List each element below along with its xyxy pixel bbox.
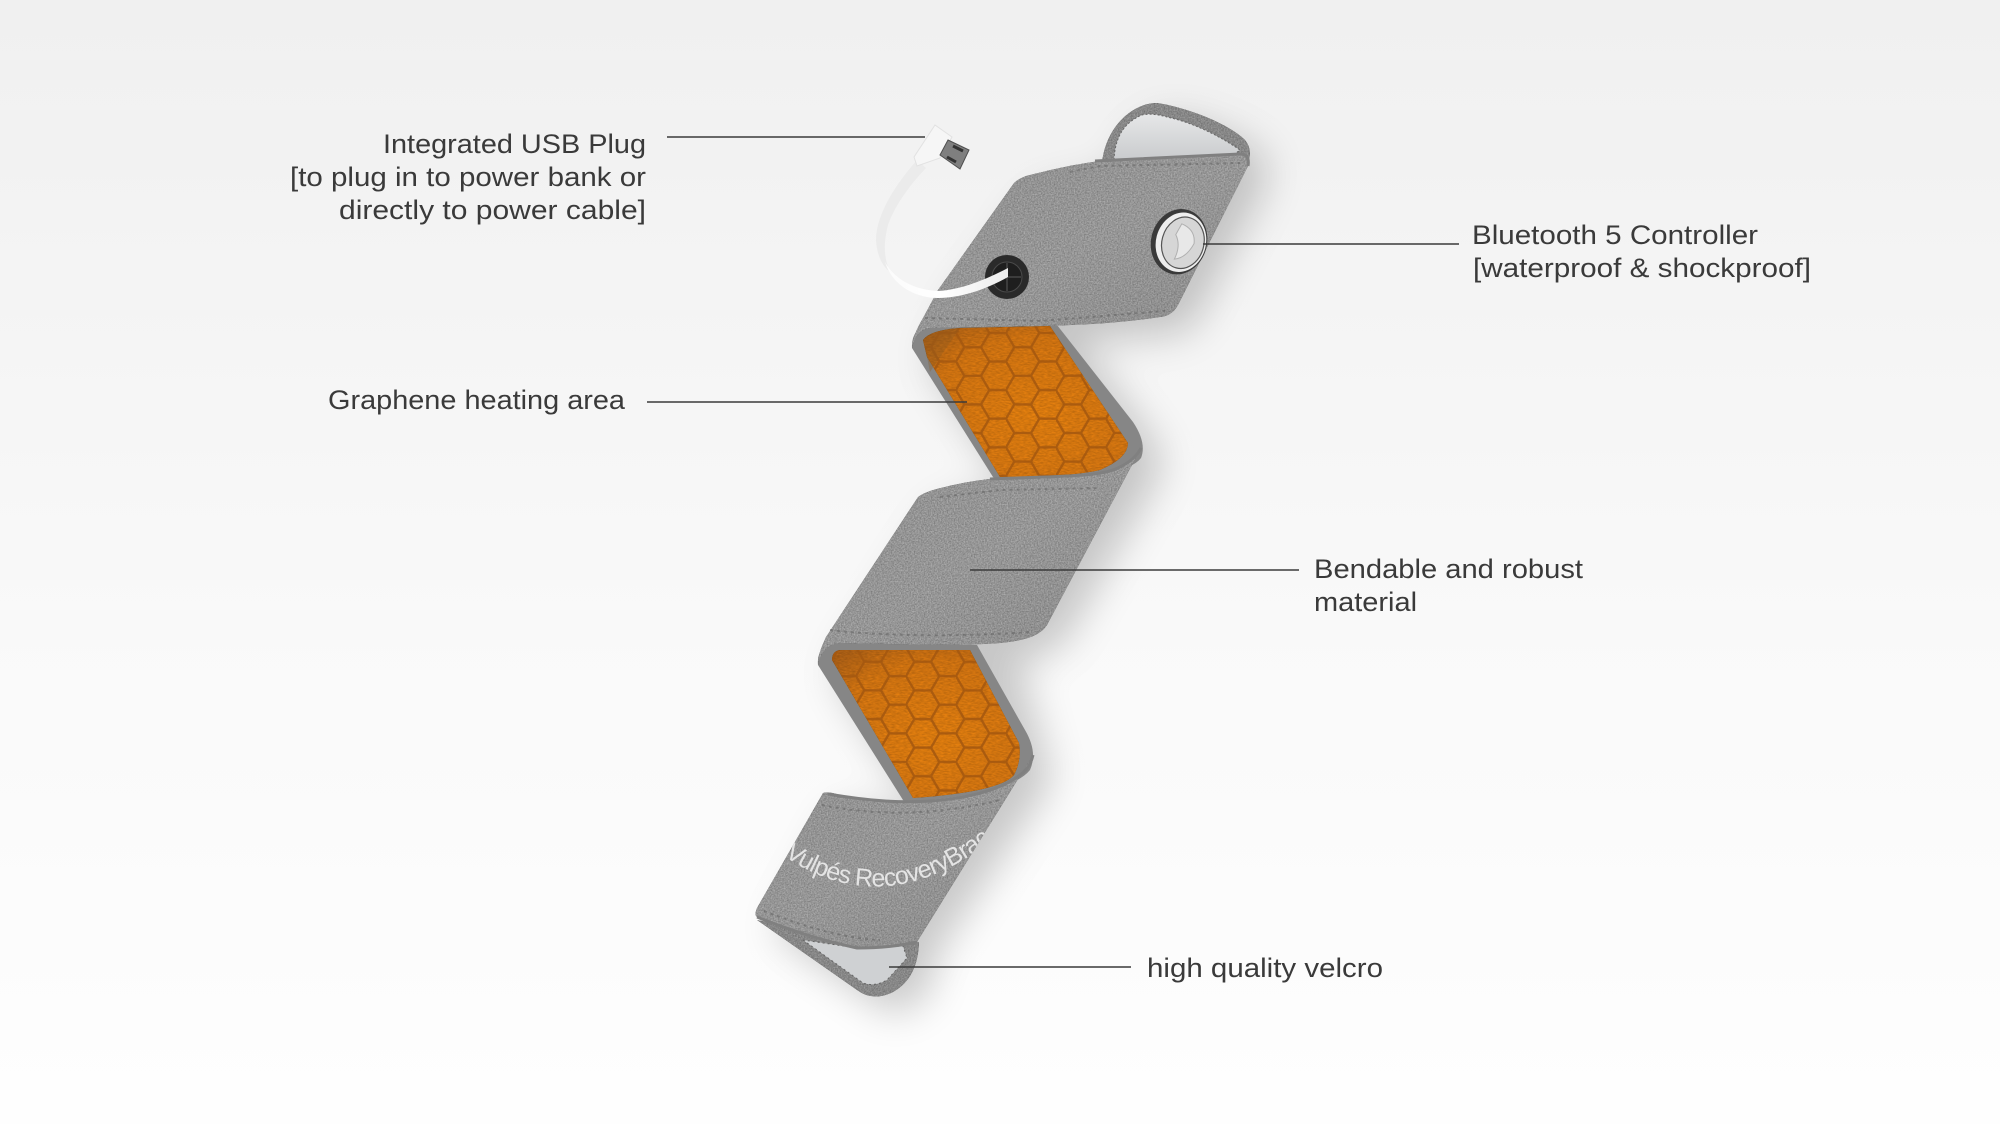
usb cable (876, 160, 1008, 298)
callout: bendable material: material (1314, 587, 1417, 617)
printed brand name (790, 832, 984, 887)
usb plug (914, 125, 969, 169)
product: heated recovery brace (756, 103, 1250, 996)
callout: USB plug (290, 129, 925, 225)
callout: USB plug: [to plug in to power bank or (290, 162, 646, 192)
orange heating panel lower (818, 642, 1033, 802)
callout: Bluetooth controller (1203, 220, 1811, 283)
callout: velcro: high quality velcro (1147, 953, 1383, 983)
callout: graphene heating: Graphene heating area (328, 385, 626, 415)
upper fabric band (912, 154, 1249, 348)
lower velcro tab (757, 920, 919, 997)
callout: Bluetooth controller: [waterproof & shockproof] (1473, 253, 1811, 283)
callout: Bluetooth controller: Bluetooth 5 Controller (1472, 220, 1758, 250)
shadow under brace (775, 119, 1267, 1014)
top velcro loop (1102, 103, 1250, 163)
callout: bendable material: Bendable and robust (1314, 554, 1584, 584)
orange heating panel upper (912, 325, 1143, 482)
bluetooth controller button (1143, 203, 1215, 281)
callout: bendable material (970, 554, 1584, 617)
middle fabric band (818, 448, 1141, 665)
callout: USB plug: directly to power cable] (339, 195, 646, 225)
lower fabric band (756, 755, 1034, 950)
callout: USB plug: Integrated USB Plug (383, 129, 646, 159)
black cable grommet (985, 255, 1029, 299)
